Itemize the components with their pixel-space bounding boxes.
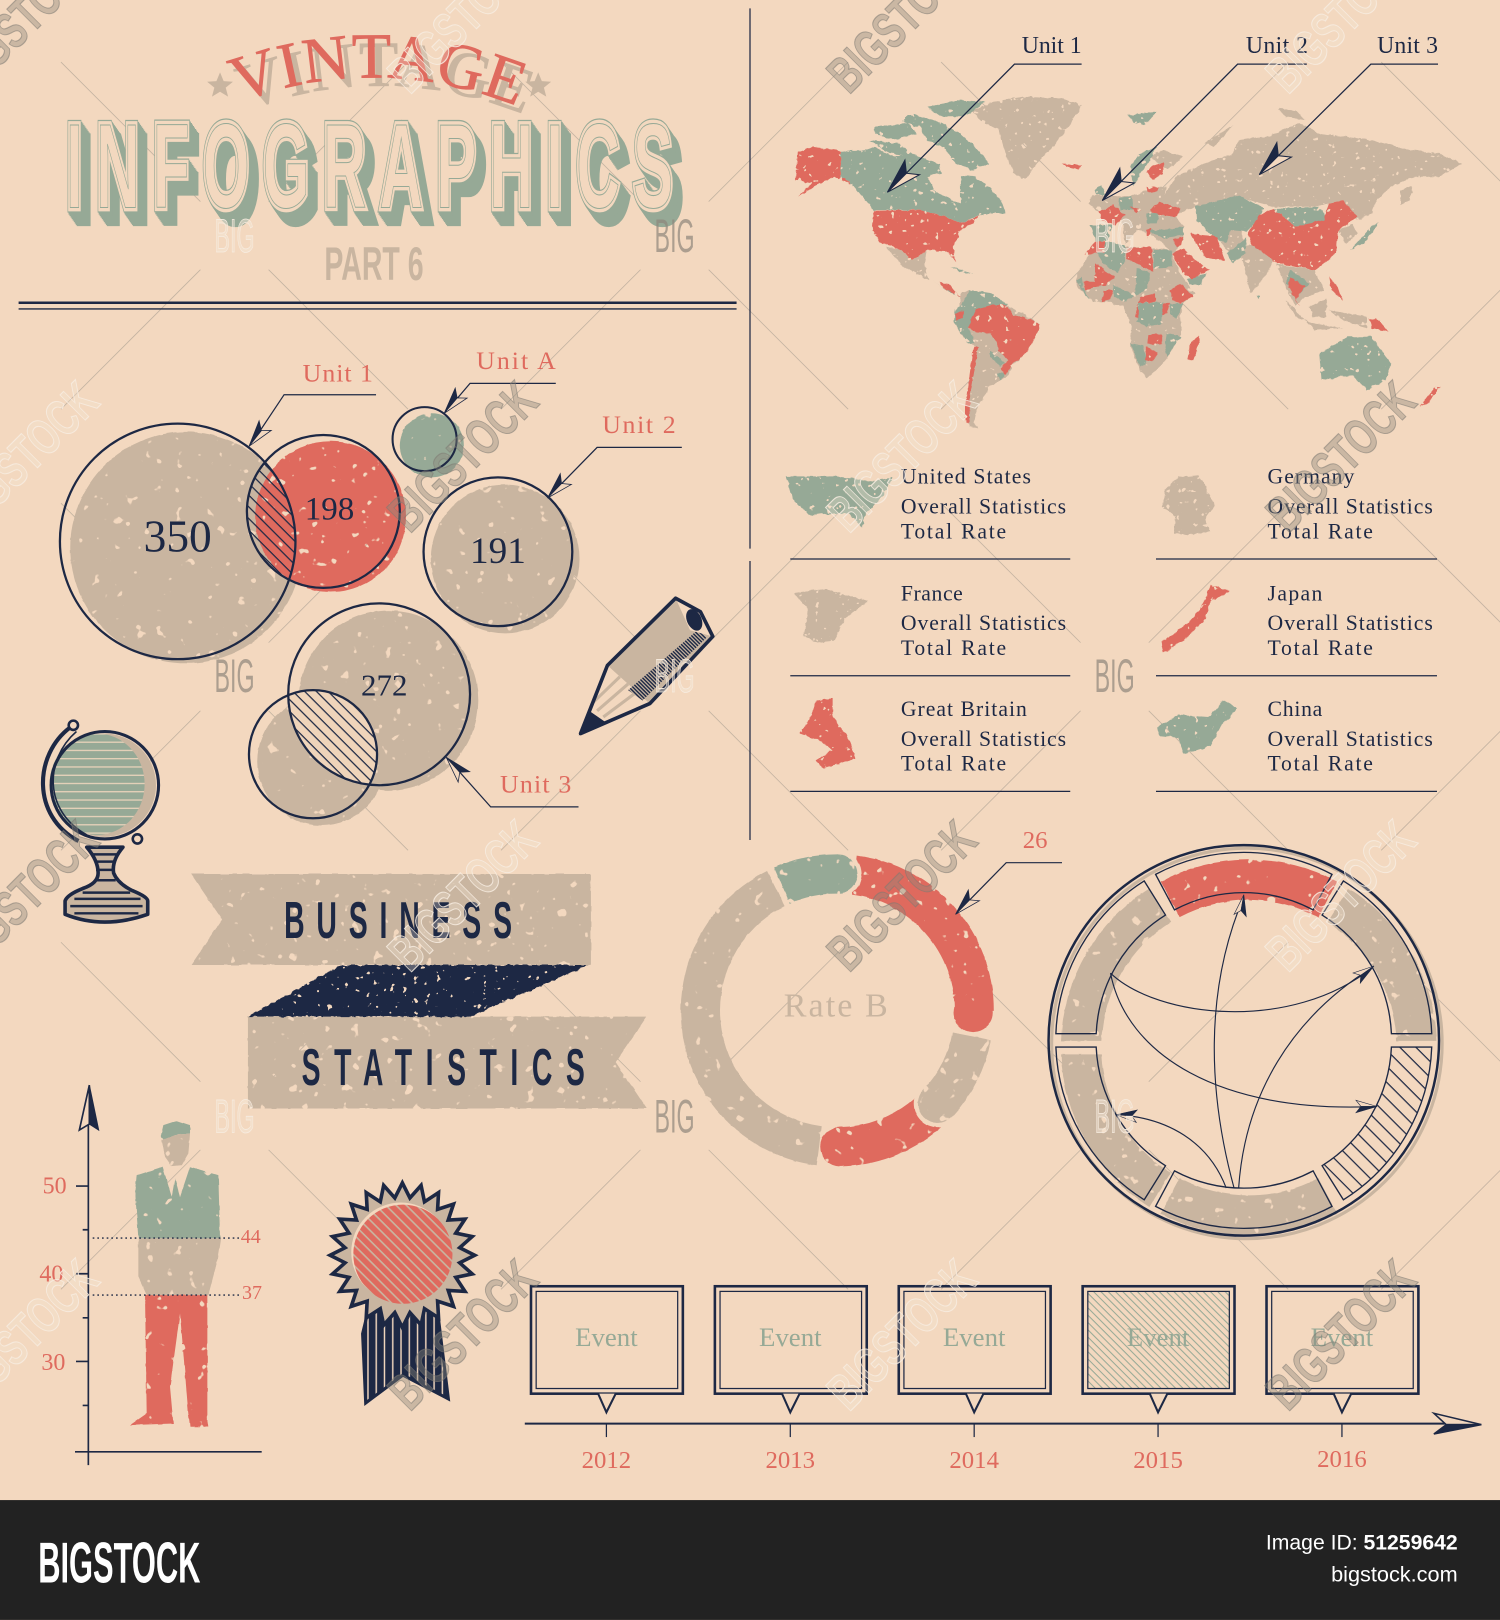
man figure [130, 1121, 221, 1427]
event 2012: 2012 [582, 1447, 631, 1474]
event 2015 [1083, 1286, 1235, 1474]
event 2012: Event [575, 1322, 638, 1352]
watermarks: BIGSTOCK [1256, 1250, 1427, 1421]
callout: unit 2 [542, 410, 682, 503]
callout: map unit 1: Unit 1 [1022, 33, 1082, 59]
row: United States: Total Rate [901, 519, 1006, 543]
watermarks: BIGSTOCK [1256, 811, 1427, 982]
watermarks: BIG [1095, 649, 1135, 702]
chord arrows [1115, 894, 1378, 1122]
title word: Vintage: VINTAGE [233, 43, 533, 114]
banner fold [248, 965, 589, 1017]
title word: Vintage: VINTAGE [226, 35, 526, 105]
bubble 191 [424, 477, 572, 626]
row: United States: Overall Statistics [901, 495, 1066, 519]
bubble unit A [393, 407, 457, 471]
callout: 26: 26 [1023, 827, 1048, 854]
map: northern, asian and oceanian regions [795, 97, 1463, 407]
title word: Infographics: INFOGRAPHICS [66, 100, 687, 234]
bubble fills [70, 413, 580, 825]
title stars [207, 72, 551, 97]
footer band [0, 1500, 1500, 1620]
map: americas south, europe, africa, middle east [954, 147, 1273, 428]
event 2016: Event [1311, 1322, 1374, 1352]
title word: Infographics: INFOGRAPHICS [69, 105, 690, 239]
chart: man height [39, 1085, 262, 1465]
title word: Infographics: INFOGRAPHICS [72, 110, 693, 244]
row: Great Britain: Total Rate [901, 752, 1006, 776]
watermarks: BIGSTOCK [817, 1250, 988, 1421]
axis labels: 30 [41, 1350, 65, 1376]
subtitle: PART 6 [324, 238, 424, 291]
watermarks: BIGSTOCK [817, 811, 988, 982]
watermarks: BIG [214, 209, 255, 262]
row: Japan: Overall Statistics [1268, 611, 1433, 635]
banner shapes [191, 874, 647, 1109]
world map [795, 97, 1463, 428]
rosette disc [351, 1203, 452, 1304]
row: Germany: Germany [1268, 465, 1354, 489]
watermarks: BIGSTOCK [378, 1250, 549, 1421]
banner: business statistics [191, 874, 647, 1109]
watermarks: BIG [655, 1089, 695, 1142]
callout: map unit 2: Unit 2 [1246, 33, 1308, 59]
callout: unit 1 [243, 358, 376, 451]
axis labels: 50 [43, 1173, 67, 1199]
callout: unit A [438, 346, 556, 418]
watermarks: BIGSTOCK [378, 371, 549, 543]
title word: Infographics: INFOGRAPHICS [73, 111, 694, 245]
bubble 198: 198 [305, 492, 354, 528]
row: Germany: Overall Statistics [1268, 495, 1433, 519]
watermarks: BIGSTOCK [378, 811, 549, 982]
vertical divider [749, 8, 751, 840]
watermarks: BIG [1095, 209, 1135, 262]
bubble 191: 191 [470, 531, 526, 572]
ring outer circle [1049, 845, 1442, 1239]
title word: Infographics: INFOGRAPHICS [67, 102, 688, 236]
event 2015: Event [1127, 1322, 1190, 1352]
footer image id: Image ID: 51259642 [1266, 1532, 1458, 1555]
title word: Infographics: INFOGRAPHICS [70, 106, 691, 240]
timeline axis arrow [525, 1413, 1481, 1434]
rosette ribbon [363, 1304, 448, 1403]
row: France: France [901, 581, 963, 605]
icon: rosette medal [330, 1183, 475, 1403]
row: Great Britain: Overall Statistics [901, 727, 1066, 751]
title word: Infographics: INFOGRAPHICS [74, 113, 695, 247]
watermarks: BIG [655, 649, 695, 702]
event 2013 [715, 1286, 867, 1474]
axis labels [39, 1173, 262, 1376]
row: France: Overall Statistics [901, 611, 1066, 635]
row: China: Total Rate [1268, 752, 1373, 776]
event 2014 [899, 1286, 1051, 1474]
chord curves [1111, 897, 1375, 1188]
axes [75, 1085, 262, 1465]
country shapes [786, 475, 1238, 769]
bubble 350 [58, 422, 297, 660]
row: France [790, 581, 1070, 676]
row: China [1156, 697, 1437, 791]
axis labels: 40 [39, 1261, 63, 1287]
title word: Infographics: INFOGRAPHICS [66, 100, 687, 234]
axis labels: 44 [241, 1226, 261, 1248]
event 2015: 2015 [1133, 1447, 1183, 1474]
row: United States: United States [901, 465, 1031, 489]
bubble 198 [247, 435, 400, 588]
row: China: Overall Statistics [1268, 727, 1433, 751]
event 2014: 2014 [949, 1447, 999, 1474]
title word: Infographics: INFOGRAPHICS [75, 114, 696, 248]
icon: globe [43, 721, 159, 922]
callout: map unit 1 [880, 33, 1082, 200]
donut label: Rate B [784, 988, 890, 1025]
callout: unit 2: Unit 2 [602, 410, 676, 439]
event 2013: Event [759, 1322, 822, 1352]
row: Japan: Total Rate [1268, 636, 1373, 660]
event 2013: 2013 [766, 1447, 815, 1474]
ring segment fills [1061, 860, 1437, 1236]
row: France: Total Rate [901, 636, 1006, 660]
event 2016: 2016 [1317, 1446, 1367, 1473]
footer url: bigstock.com [1331, 1562, 1458, 1587]
watermarks: BIGSTOCK [1256, 371, 1427, 543]
rosette star [330, 1183, 475, 1328]
watermarks: BIG [1095, 1089, 1135, 1142]
callout: map unit 2 [1095, 33, 1308, 208]
event 2014: Event [943, 1322, 1006, 1352]
chart: chord ring [1049, 845, 1442, 1239]
chart: donut rate B [700, 827, 1062, 1166]
callout: unit A: Unit A [476, 346, 556, 375]
banner text top: BUSINESS [284, 891, 524, 949]
panel: country list [786, 465, 1437, 791]
donut segments [700, 850, 993, 1166]
title word: Infographics: INFOGRAPHICS [71, 108, 692, 242]
event 2016 [1267, 1286, 1418, 1473]
watermark hairlines [61, 62, 1500, 1289]
bubble 272 [249, 603, 470, 818]
title [66, 35, 696, 291]
row: Japan: Japan [1268, 581, 1322, 605]
watermarks: BIG [655, 209, 695, 262]
row: China: China [1268, 697, 1323, 721]
row: Great Britain [790, 697, 1070, 791]
watermarks: BIGSTOCK [817, 371, 988, 543]
ring segment outlines [1056, 852, 1432, 1228]
icon: pencil [581, 598, 713, 734]
callout: map unit 3: Unit 3 [1377, 33, 1438, 59]
row: United States [790, 465, 1070, 559]
bubble 272: 272 [361, 667, 408, 702]
banner text bottom: STATISTICS [302, 1038, 598, 1096]
row: Great Britain: Great Britain [901, 697, 1027, 721]
callout: map unit 3 [1252, 33, 1438, 182]
title word: Infographics: INFOGRAPHICS [66, 100, 687, 234]
watermarks: BIG [214, 649, 255, 702]
callout: unit 1: Unit 1 [303, 358, 373, 387]
panel: venn bubbles [60, 346, 682, 825]
dotted levels [93, 1238, 242, 1295]
watermarks: BIG [214, 1089, 255, 1142]
row: Germany: Total Rate [1268, 519, 1373, 543]
bubble 350: 350 [144, 511, 212, 562]
event 2012 [531, 1286, 683, 1474]
footer logo: BIGSTOCK [38, 1532, 201, 1596]
callout: 26 [950, 827, 1062, 920]
header divider [19, 303, 737, 309]
callout: unit 3: Unit 3 [500, 769, 571, 798]
callout: unit 3 [441, 752, 579, 807]
row: Germany [1156, 465, 1437, 559]
axis labels: 37 [242, 1282, 262, 1304]
title word: Infographics: INFOGRAPHICS [68, 103, 689, 237]
row: Japan [1156, 581, 1437, 676]
timeline [525, 1286, 1481, 1474]
